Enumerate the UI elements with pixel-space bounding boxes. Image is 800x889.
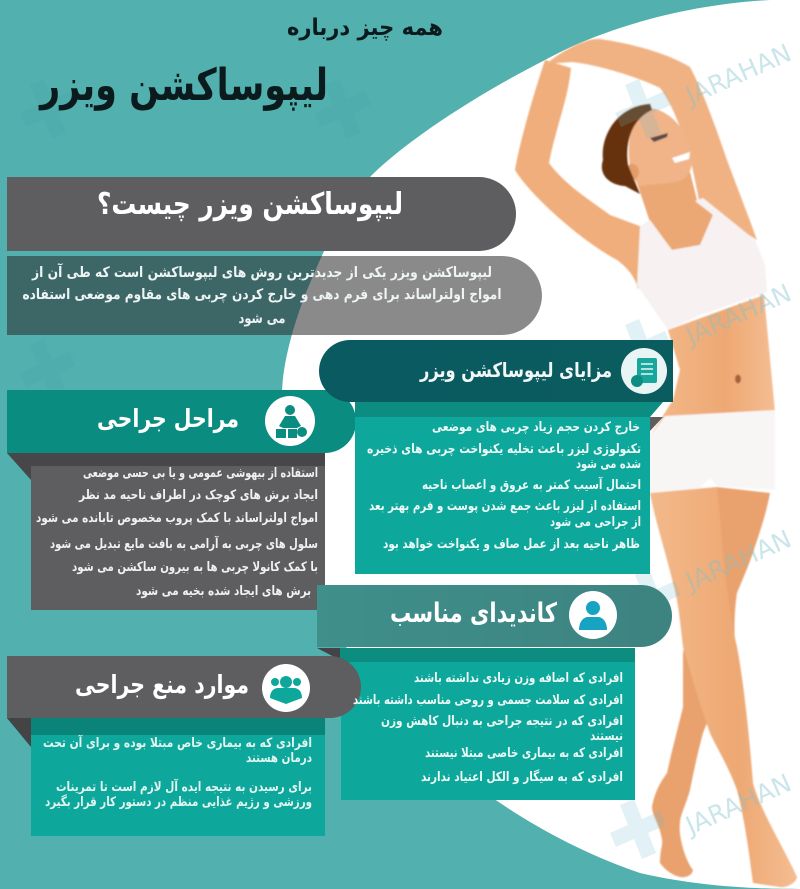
contraindications list: درمان هستند bbox=[246, 751, 312, 766]
candidates list: افرادی که اضافه وزن زیادی نداشته باشند bbox=[414, 671, 623, 686]
watermark 2: JARAHAN bbox=[680, 278, 796, 351]
candidates list bbox=[353, 671, 623, 785]
back leg bbox=[652, 487, 770, 877]
benefits list: خارج کردن حجم زیاد چربی های موضعی bbox=[432, 420, 640, 435]
watermark 4: JARAHAN bbox=[680, 768, 796, 841]
right arm bbox=[546, 39, 757, 240]
benefits list: استفاده از لیزر باعث جمع شدن پوست و فرم بهتر بعد bbox=[369, 499, 641, 514]
shorts bbox=[650, 410, 775, 493]
benefits list: از جراحی می شود bbox=[550, 515, 641, 530]
contraindications list: افرادی که به بیماری خاص مبتلا بوده و برای آن تحت bbox=[43, 734, 312, 751]
white curved area bbox=[282, 0, 800, 889]
panel: what is it text: لیپوساکشن ویزر یکی از جدیدترین روش های لیپوساکشن است که طی آن از bbox=[31, 263, 492, 281]
panel: what is it text: امواج اولتراساند برای فرم دهی و خارج کردن چربی های مقاوم موضعی استفاده bbox=[22, 287, 502, 303]
watermark crosses bbox=[20, 79, 681, 859]
sports top bbox=[637, 198, 767, 330]
stages header bbox=[7, 390, 356, 453]
stages title: مراحل جراحی bbox=[97, 404, 239, 434]
benefits list: تکنولوژی لیزر باعث تخلیه یکنواخت چربی های ذخیره bbox=[367, 442, 641, 457]
benefits header bbox=[319, 340, 673, 402]
candidates list: افرادی که سلامت جسمی و روحی مناسب داشته باشند bbox=[353, 693, 623, 708]
panel: what is it heading bbox=[7, 177, 516, 251]
watermark 3: JARAHAN bbox=[680, 524, 796, 597]
candidates list: افرادی که به سیگار و الکل اعتیاد ندارند bbox=[421, 769, 623, 785]
ear bbox=[625, 164, 639, 180]
hair bbox=[602, 104, 652, 194]
candidates list: افرادی که به بیماری خاصی مبتلا نیستند bbox=[425, 746, 623, 761]
eye and mouth bbox=[650, 133, 668, 142]
stages list: ایجاد برش های کوچک در اطراف ناحیه مد نظر bbox=[78, 488, 318, 503]
contraindications list: ورزشی و رژیم غذایی منظم در دستور کار قرار بگیرد bbox=[45, 794, 312, 810]
panel: what is it text: می شود bbox=[238, 311, 286, 327]
stages body bbox=[31, 466, 325, 610]
stages list: سلول های چربی به آرامی به بافت مایع تبدیل می شود bbox=[50, 535, 318, 552]
panel: contraindications bbox=[7, 656, 361, 836]
candidates fold bbox=[340, 648, 635, 662]
candidates header bbox=[317, 585, 672, 647]
stages list bbox=[36, 466, 318, 599]
face bbox=[629, 108, 692, 186]
contraindications list bbox=[43, 734, 312, 810]
candidates title: کاندیدای مناسب bbox=[390, 598, 557, 629]
benefits fold bbox=[355, 402, 663, 417]
contraindications list: برای رسیدن به نتیجه ایده آل لازم است تا تمرینات bbox=[56, 778, 312, 795]
candidates list: نیستند bbox=[590, 729, 623, 744]
watermark 1: JARAHAN bbox=[680, 38, 796, 111]
left arm bbox=[515, 60, 645, 290]
stages list: با کمک کانولا چربی ها به بیرون ساکشن می شود bbox=[72, 560, 318, 575]
photo: woman stretching bbox=[515, 39, 797, 887]
panel: what is it heading: لیپوساکشن ویزر چیست؟ bbox=[97, 187, 403, 222]
icon: person bbox=[569, 591, 617, 639]
benefits body bbox=[355, 417, 650, 574]
panel: what is it text bbox=[7, 256, 542, 335]
contraindications fold bbox=[7, 718, 325, 747]
benefits list bbox=[367, 420, 641, 552]
stages list: استفاده از بیهوشی عمومی و یا بی حسی موضعی bbox=[83, 466, 318, 481]
benefits list: ظاهر ناحیه بعد از عمل صاف و یکنواخت خواهد بود bbox=[383, 537, 640, 552]
title line small: همه چیز درباره bbox=[287, 15, 443, 41]
neck and chest bbox=[636, 172, 713, 250]
panel: suitable candidates bbox=[317, 585, 672, 800]
candidates list: افرادی که در نتیجه جراحی به دنبال کاهش وزن bbox=[381, 714, 623, 729]
panel: benefits bbox=[319, 340, 673, 574]
benefits list: احتمال آسیب کمتر به عروق و اعصاب ناحیه bbox=[422, 476, 641, 493]
contraindications header bbox=[7, 656, 361, 718]
torso bbox=[650, 295, 775, 436]
contraindications body bbox=[31, 735, 325, 836]
panel: surgery stages bbox=[7, 390, 356, 610]
front leg bbox=[650, 487, 797, 887]
benefits title: مزایای لیپوساکشن ویزر bbox=[419, 358, 612, 383]
title line large: لیپوساکشن ویزر bbox=[38, 60, 328, 111]
stages list: امواج اولتراساند با کمک پروب مخصوص تابانده می شود bbox=[36, 511, 318, 526]
icon: group of people bbox=[262, 664, 310, 712]
contraindications title: موارد منع جراحی bbox=[75, 670, 249, 700]
icon: surgeon bbox=[265, 396, 315, 446]
icon: checklist bbox=[621, 348, 667, 394]
benefits list: شده می شود bbox=[576, 457, 641, 472]
title bbox=[38, 15, 443, 111]
stages list: برش های ایجاد شده بخیه می شود bbox=[136, 584, 311, 599]
candidates body bbox=[341, 662, 635, 800]
stages fold bbox=[7, 453, 325, 480]
